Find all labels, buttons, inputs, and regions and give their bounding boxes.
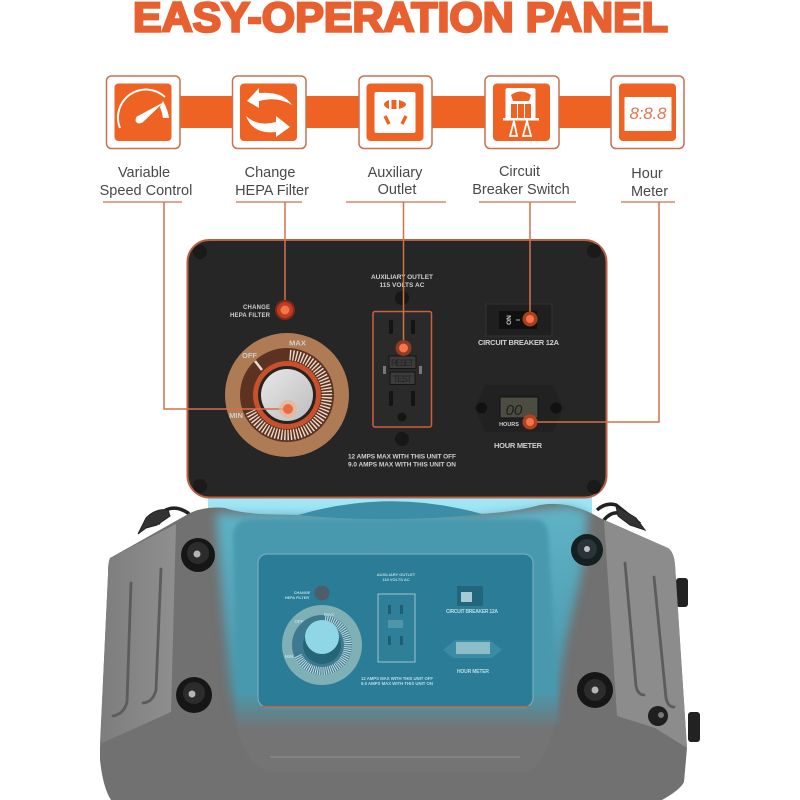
mini amps note: 12 AMPS MAX WITH THIS UNIT OFF [361, 676, 433, 681]
bolt: upper right [571, 534, 603, 566]
machine: lower body recess [233, 690, 560, 772]
bolt: lower left [176, 677, 212, 713]
amps note [348, 454, 456, 468]
icon: hour meter [611, 76, 684, 148]
mini outlet [377, 572, 416, 662]
circuit breaker: ON [506, 315, 513, 325]
label: circuit breaker switch: Circuit [499, 164, 540, 180]
mini dial: OFF [294, 619, 304, 624]
control panel [188, 240, 606, 498]
mini dial: MAX [324, 612, 334, 617]
teal outer glow [216, 506, 588, 735]
hour meter: HOURS [499, 422, 519, 428]
auxiliary outlet: TEST [393, 374, 412, 384]
label: variable speed control: Variable [118, 165, 170, 181]
hour meter: HOUR METER [494, 441, 543, 450]
hour meter [475, 385, 563, 450]
hour meter: 1/10 [526, 422, 536, 428]
machine: cyan light beam top [208, 497, 592, 520]
mini change filter: CHANGE [294, 591, 311, 595]
label: change hepa filter: HEPA Filter [235, 183, 309, 199]
label: auxiliary outlet [368, 165, 423, 198]
label: hour meter: Meter [631, 184, 668, 200]
leader line: hour meter [522, 202, 659, 430]
change hepa filter text: HEPA FILTER [230, 313, 271, 319]
label underlines [103, 201, 675, 203]
icon: hour meter: 8:8.8 [630, 104, 667, 123]
leader line: outlet [396, 202, 412, 356]
auxiliary outlet text [371, 274, 433, 289]
label: variable speed control: Speed Control [100, 183, 192, 199]
outlet screws [395, 291, 409, 446]
leader line: speed control [164, 202, 297, 418]
mini panel bottom edge [262, 706, 530, 708]
change hepa filter text: CHANGE [243, 305, 270, 311]
dial labels: OFF [242, 351, 257, 360]
bolt: lower right [577, 672, 613, 708]
bolt: upper left [181, 538, 215, 572]
mini change filter [285, 586, 330, 600]
machine: right flank [604, 520, 687, 748]
label: hour meter [631, 166, 668, 200]
auxiliary outlet [373, 312, 432, 427]
icon: auxiliary outlet [359, 76, 432, 148]
change hepa filter text [230, 305, 271, 319]
label: circuit breaker switch: Breaker Switch [472, 182, 570, 198]
teal recess [233, 519, 558, 735]
icon: change filter arrows [232, 76, 306, 148]
mini amps note [361, 676, 433, 686]
machine: bottom highlight [270, 756, 520, 758]
machine: flank grooves [113, 563, 674, 716]
mini dial [282, 605, 362, 685]
machine: left flank [100, 524, 176, 744]
hour meter: 00 [506, 402, 523, 419]
circuit breaker: CIRCUIT BREAKER 12A [478, 338, 560, 347]
machine: side knobs [676, 578, 700, 742]
icon: circuit breaker switch [485, 76, 559, 148]
dial labels: MIN [229, 411, 243, 420]
label: variable speed control [100, 165, 192, 199]
label: hour meter: Hour [631, 166, 663, 182]
machine: dome [298, 501, 482, 519]
label: change hepa filter: Change [245, 165, 295, 181]
machine: teal overlay [216, 506, 588, 735]
circuit breaker [478, 304, 560, 347]
auxiliary outlet text: AUXILIARY OUTLET [371, 274, 433, 281]
mini outlet: AUXILIARY OUTLET [377, 572, 416, 577]
mini change filter: HEPA FILTER [285, 596, 309, 600]
auxiliary outlet text: 115 VOLTS AC [380, 282, 425, 289]
panel screws [193, 244, 601, 494]
amps note: 12 AMPS MAX WITH THIS UNIT OFF [348, 454, 456, 460]
machine: side handles [138, 504, 645, 534]
machine: grey body [100, 504, 687, 800]
dial labels: MAX [289, 338, 306, 348]
label: circuit breaker switch [472, 164, 570, 198]
bolt: small right [648, 706, 668, 726]
label: auxiliary outlet: Outlet [378, 182, 416, 198]
icon: variable speed gauge [106, 76, 180, 148]
label: auxiliary outlet: Auxiliary [368, 165, 423, 181]
leader line: circuit breaker [522, 202, 538, 326]
orange connector band [180, 96, 612, 128]
mini outlet: 115 VOLTS AC [382, 577, 410, 582]
label: change hepa filter [235, 165, 309, 199]
auxiliary outlet: RESET [391, 358, 414, 368]
speed dial [225, 333, 349, 457]
mini circuit breaker [446, 586, 498, 615]
mini hour meter: HOUR METER [457, 669, 489, 675]
dial labels [229, 338, 306, 420]
leader line: change filter [275, 202, 295, 320]
amps note: 9.0 AMPS MAX WITH THIS UNIT ON [348, 462, 456, 468]
mini circuit breaker: CIRCUIT BREAKER 12A [446, 609, 498, 615]
mini hour meter [443, 640, 502, 675]
mini panel [258, 554, 533, 707]
mini dial: MIN [285, 654, 293, 659]
mini amps note: 9.0 AMPS MAX WITH THIS UNIT ON [361, 681, 433, 686]
